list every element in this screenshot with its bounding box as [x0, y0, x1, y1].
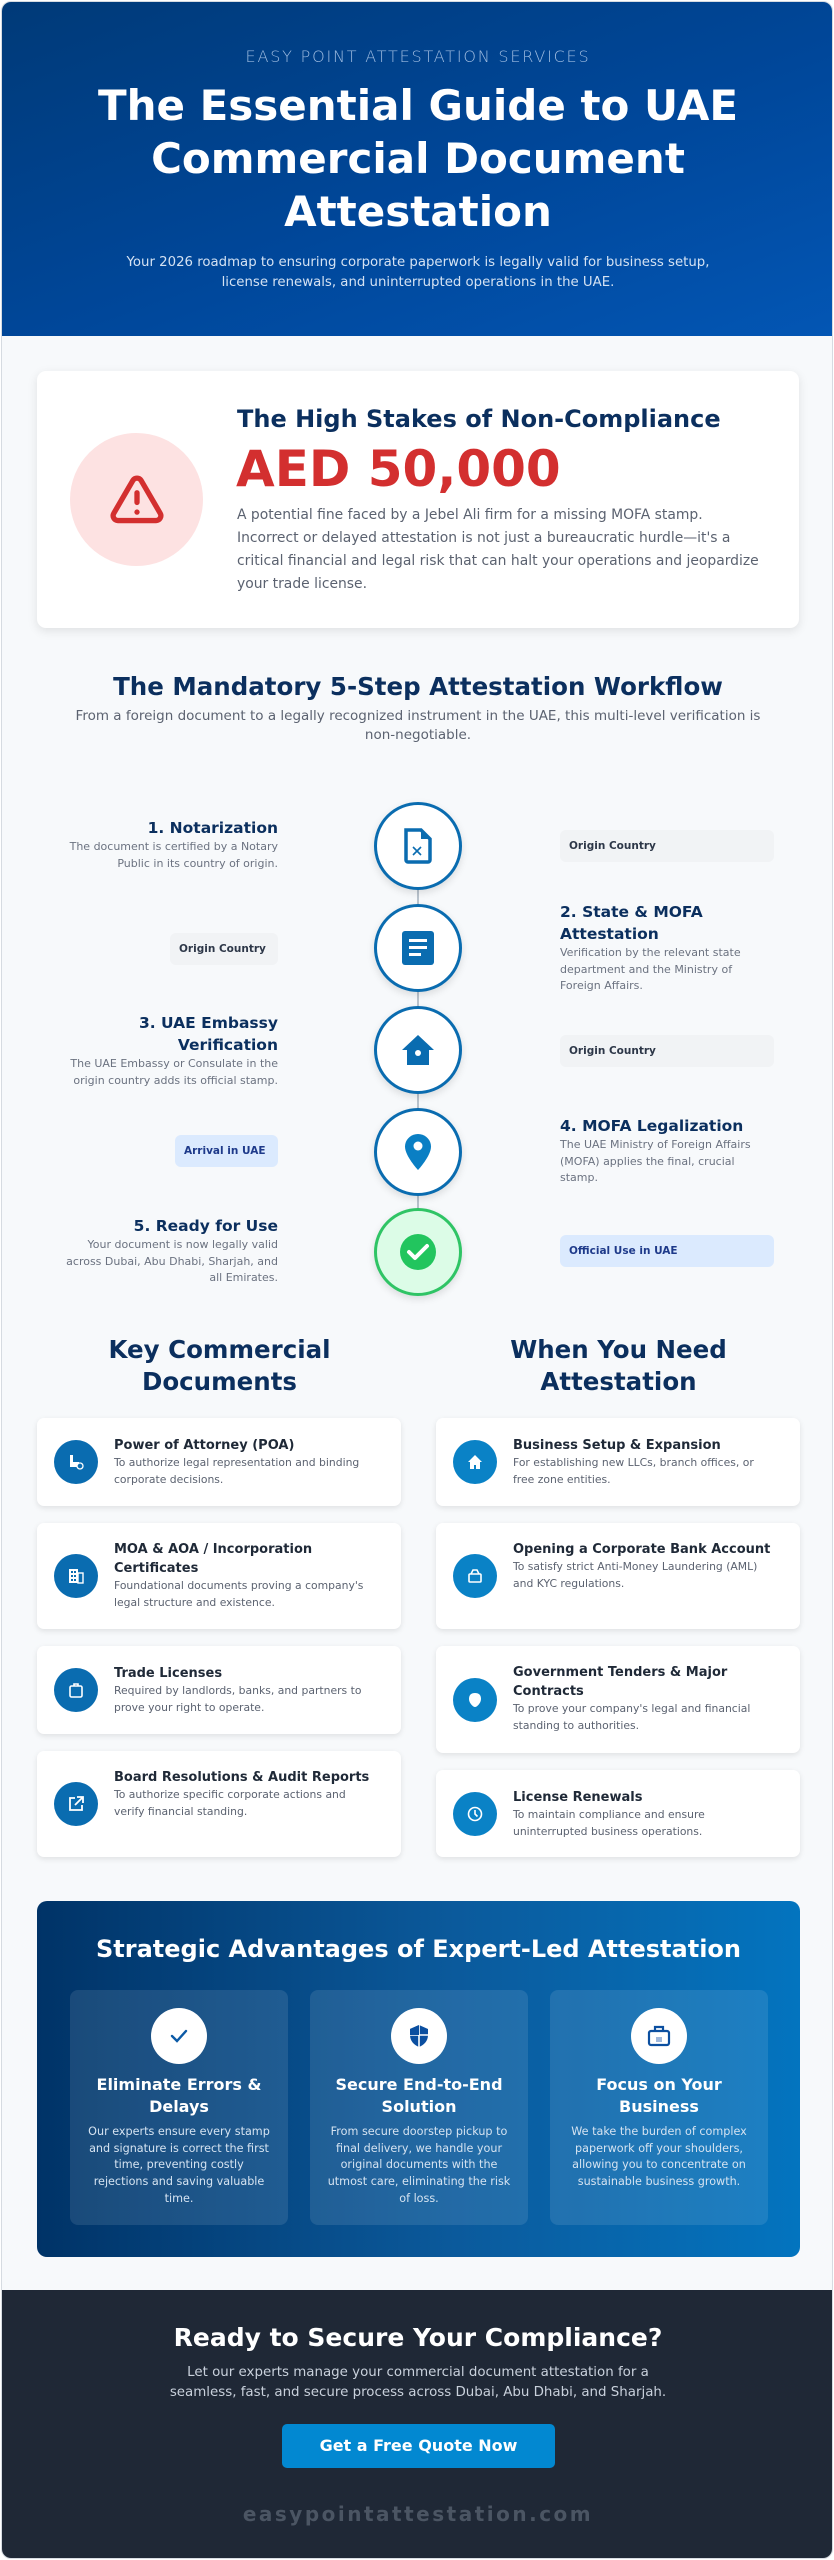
badge: origin country 3: Origin Country: [569, 1045, 656, 1057]
badge: official use: Official Use in UAE: [569, 1245, 678, 1257]
step 2 text: Verification by the relevant state department and the Ministry of Foreign Affairs.: [560, 946, 741, 992]
card: MOA: Foundational documents proving a company's legal structure and existence.: [114, 1579, 363, 1608]
title: Attestation: [284, 187, 552, 236]
step 5 text: Your document is now legally valid across Dubai, Abu Dhabi, Sharjah, and all Emirates.: [66, 1238, 278, 1284]
icon: external link: [54, 1782, 98, 1826]
step 2 text: 2. State & MOFA Attestation: [560, 903, 703, 943]
icon: step 1 document: [374, 802, 462, 890]
step 4 text: The UAE Ministry of Foreign Affairs (MOFA) applies the final, crucial stamp.: [560, 1138, 751, 1184]
heading: when you need: Attestation: [540, 1367, 697, 1396]
card: trade licenses: Required by landlords, banks, and partners to prove your right to operate.: [114, 1684, 361, 1714]
footer: call to action: [2, 2290, 834, 2560]
alert heading: The High Stakes of Non-Compliance: [237, 405, 721, 433]
icon: clock: [453, 1792, 497, 1836]
step 2 text: [560, 903, 741, 992]
heading: key documents: Key Commercial: [108, 1335, 331, 1364]
card: board resolutions: [37, 1751, 401, 1857]
title: [98, 81, 738, 236]
card: license renewals: License Renewals: [513, 1790, 642, 1805]
step 3 text: [70, 1014, 278, 1087]
card: business setup: [436, 1418, 800, 1506]
icon: step 3 embassy: [374, 1006, 462, 1094]
title: The Essential Guide to UAE: [98, 81, 738, 130]
card: board resolutions: Board Resolutions & Audit Reports: [114, 1770, 369, 1785]
button: Get a Free Quote Now: [320, 2436, 517, 2455]
badge: origin country 1: [560, 830, 774, 862]
card: eliminate errors: Eliminate Errors & Delays: [97, 2075, 261, 2116]
workflow subtitle: From a foreign document to a legally recognized instrument in the UAE, this multi-level verification is non-negotiable.: [76, 708, 760, 743]
step 5 text: 5. Ready for Use: [134, 1217, 278, 1235]
step 1 text: 1. Notarization: [148, 819, 278, 837]
card: secure solution: [310, 1990, 528, 2225]
strategic heading: Strategic Advantages of Expert-Led Attestation: [96, 1935, 741, 1963]
icon: warning: [70, 433, 203, 566]
card: tenders: Government Tenders & Major Contracts: [513, 1665, 727, 1699]
alert text: A potential fine faced by a Jebel Ali firm for a missing MOFA stamp. Incorrect or delayed attestation is not just a bureaucratic hurdle—it's a critical financial and legal risk that can halt your operations and jeopardize your trade license.: [237, 507, 759, 592]
badge: origin country 3: [560, 1035, 774, 1067]
icon: home: [453, 1440, 497, 1484]
card: board resolutions: To authorize specific corporate actions and verify financial standing.: [114, 1788, 346, 1818]
icon: briefcase: [54, 1668, 98, 1712]
icon: shield: [391, 2008, 447, 2064]
timeline: [417, 890, 419, 1208]
card: MOA: MOA & AOA / Incorporation Certificates: [114, 1542, 312, 1576]
card: license renewals: To maintain compliance and ensure uninterrupted business operations.: [513, 1808, 705, 1838]
badge: origin country 2: [170, 933, 278, 965]
cta text: Let our experts manage your commercial document attestation for a seamless, fast, and secure process across Dubai, Abu Dhabi, and Sharjah.: [170, 2365, 666, 2400]
badge: arrival in UAE: Arrival in UAE: [184, 1145, 266, 1157]
panel: strategic advantages: [37, 1901, 800, 2257]
icon: hand: [54, 1440, 98, 1484]
card: eliminate errors: Our experts ensure every stamp and signature is correct the first time, preventing costly rejections and saving valuable time.: [88, 2125, 270, 2205]
step 5 text: [66, 1217, 278, 1284]
badge: arrival in UAE: [175, 1135, 278, 1167]
badge: origin country 1: Origin Country: [569, 840, 656, 852]
card: tenders: To prove your company's legal and financial standing to authorities.: [513, 1702, 750, 1732]
card: eliminate errors: [70, 1990, 288, 2225]
card: POA: [37, 1418, 401, 1506]
card: POA: To authorize legal representation and binding corporate decisions.: [114, 1456, 359, 1486]
tagline: EASY POINT ATTESTATION SERVICES: [246, 47, 590, 66]
card: trade licenses: [37, 1646, 401, 1734]
panel: non-compliance alert: [37, 371, 799, 628]
step 3 text: The UAE Embassy or Consulate in the origin country adds its official stamp.: [70, 1057, 278, 1087]
heading: when you need: [510, 1335, 727, 1396]
heading: key documents: Documents: [142, 1367, 297, 1396]
icon: briefcase: [631, 2008, 687, 2064]
card: MOA: [37, 1523, 401, 1629]
icon: building: [54, 1554, 98, 1598]
title: Commercial Document: [151, 134, 685, 183]
heading: when you need: When You Need: [510, 1335, 727, 1364]
step 4 text: 4. MOFA Legalization: [560, 1117, 743, 1135]
card: POA: Power of Attorney (POA): [114, 1438, 294, 1453]
icon: shield: [453, 1678, 497, 1722]
card: license renewals: [436, 1770, 800, 1857]
icon: step 5 check: [374, 1208, 462, 1296]
domain: easypointattestation.com: [243, 2502, 593, 2526]
card: secure solution: Secure End-to-End Solution: [335, 2075, 503, 2116]
card: bank account: To satisfy strict Anti-Money Laundering (AML) and KYC regulations.: [513, 1560, 757, 1590]
card: focus on business: [550, 1990, 768, 2225]
card: focus on business: We take the burden of complex paperwork off your shoulders, allowing you to concentrate on sustainable business growth.: [571, 2125, 747, 2188]
workflow heading: The Mandatory 5-Step Attestation Workflow: [113, 672, 723, 701]
cta heading: Ready to Secure Your Compliance?: [174, 2323, 662, 2352]
icon: step 2 form: [374, 904, 462, 992]
card: business setup: Business Setup & Expansion: [513, 1438, 721, 1453]
card: business setup: For establishing new LLCs, branch offices, or free zone entities.: [513, 1456, 754, 1486]
card: tenders: [436, 1646, 800, 1753]
heading: key documents: [108, 1335, 331, 1396]
card: focus on business: Focus on Your Business: [596, 2075, 722, 2116]
fine amount: AED 50,000: [236, 440, 561, 498]
badge: origin country 2: Origin Country: [179, 943, 266, 955]
card: bank account: Opening a Corporate Bank Account: [513, 1542, 770, 1557]
card: secure solution: From secure doorstep pickup to final delivery, we handle your original documents with the utmost care, eliminating the risk of loss.: [328, 2125, 510, 2205]
icon: step 4 location pin: [374, 1108, 462, 1196]
card: bank account: [436, 1523, 800, 1629]
card: trade licenses: Trade Licenses: [114, 1666, 222, 1681]
step 1 text: The document is certified by a Notary Public in its country of origin.: [70, 840, 278, 870]
step 4 text: [560, 1117, 751, 1184]
icon: bank: [453, 1554, 497, 1598]
step 1 text: [70, 819, 278, 870]
icon: check: [151, 2008, 207, 2064]
badge: official use: [560, 1235, 774, 1267]
step 3 text: 3. UAE Embassy Verification: [139, 1014, 278, 1054]
header: [2, 2, 834, 336]
subtitle: Your 2026 roadmap to ensuring corporate paperwork is legally valid for business setup, license renewals, and uninterrupted operations in the UAE.: [127, 255, 709, 290]
button: [282, 2424, 555, 2468]
